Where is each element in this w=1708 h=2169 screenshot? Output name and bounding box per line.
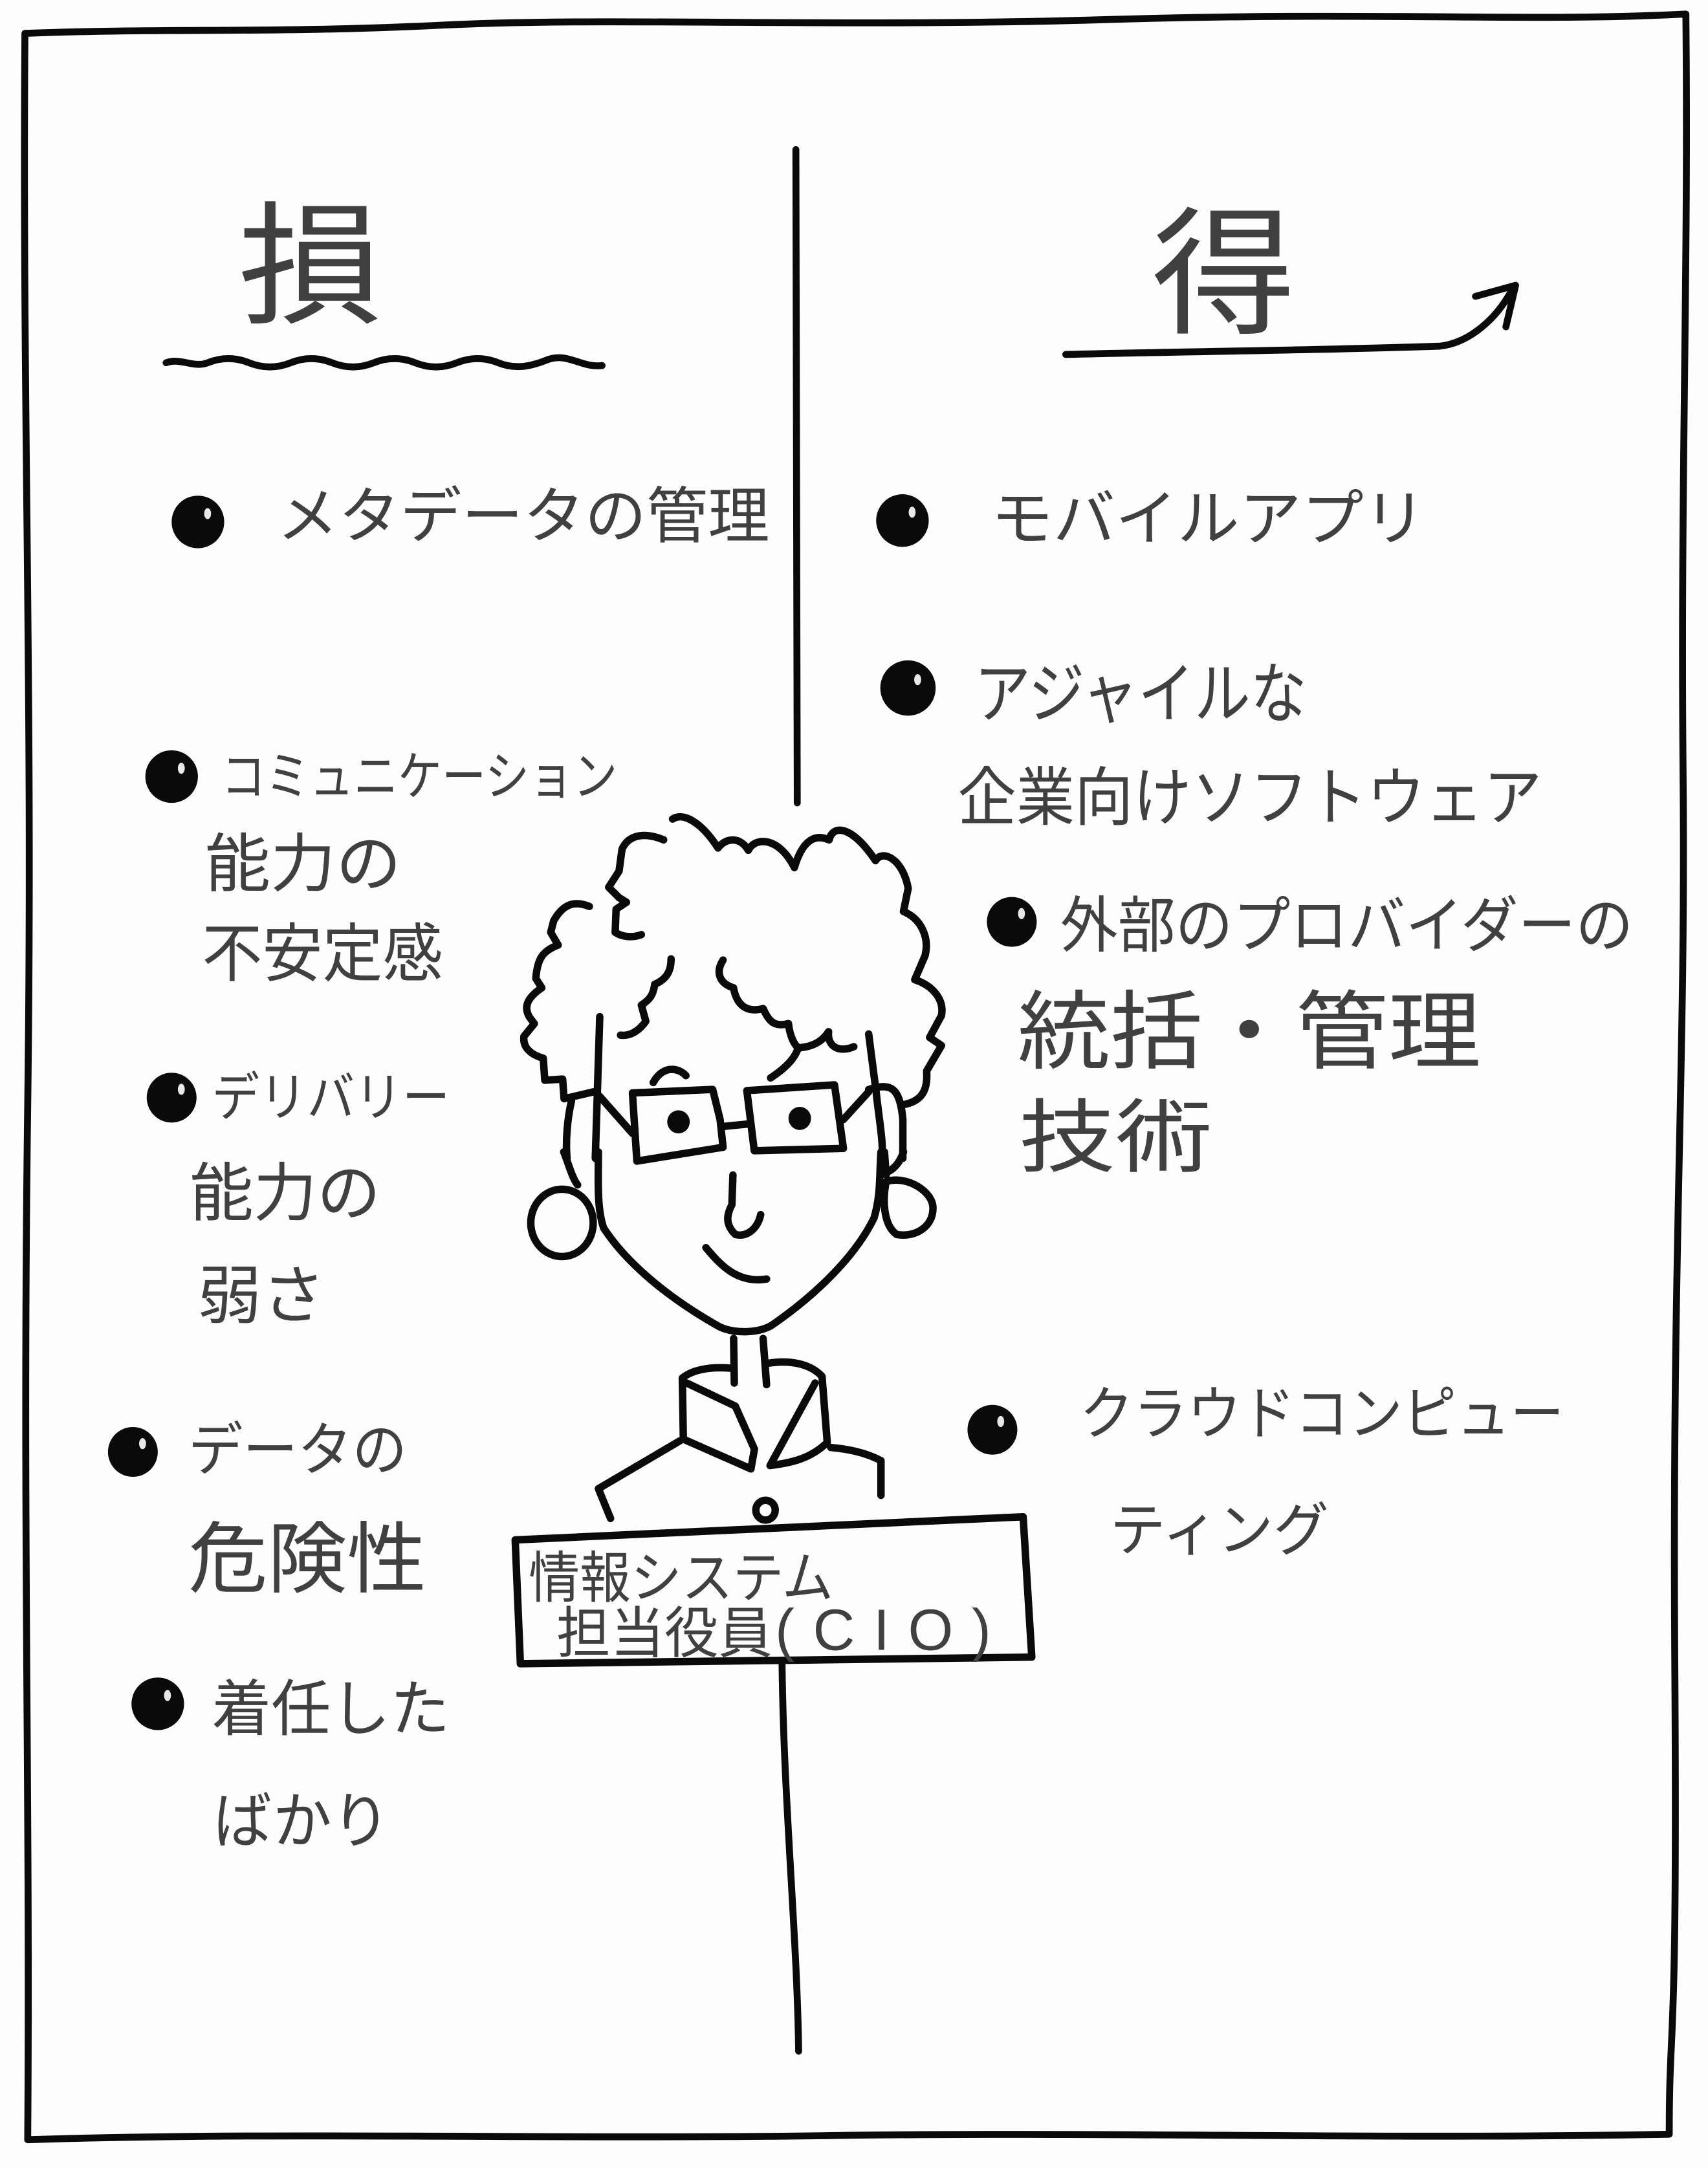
gain item: agile enterprise software: アジャイルな xyxy=(974,657,1307,731)
gain item: external provider management skills: 技術 xyxy=(1019,1094,1212,1183)
loss item: just appointed: ばかり xyxy=(213,1787,390,1855)
loss item: metadata management: メタデータの管理 xyxy=(277,482,769,550)
loss item: just appointed xyxy=(131,1675,450,1855)
gain item: cloud computing: ティング xyxy=(1110,1498,1329,1563)
hair and upper face xyxy=(524,817,942,1161)
character: CIO portrait xyxy=(524,817,942,1520)
loss item: communication skills: 不安定感 xyxy=(202,919,443,990)
heading: loss: 損 xyxy=(238,193,382,342)
name plate: 情報システム xyxy=(529,1548,833,1609)
heading: gain with arrow xyxy=(1066,198,1516,354)
loss item: communication skills: コミュニケーション xyxy=(221,747,617,806)
gain item: cloud computing: クラウドコンピュー xyxy=(1080,1382,1564,1447)
gain item: agile enterprise software xyxy=(881,657,1542,833)
name plate xyxy=(515,1517,1032,1665)
loss item: data risk xyxy=(108,1418,426,1603)
name plate: (CIO) xyxy=(775,1598,991,1662)
gain item: external provider management skills xyxy=(987,892,1633,1183)
gain item: agile enterprise software: 企業向けソフトウェア xyxy=(958,762,1542,833)
lower face, earrings, collar and shoulders xyxy=(531,1152,933,1520)
gain item: external provider management skills: 統括・管理 xyxy=(1017,985,1481,1080)
central vertical divider xyxy=(782,149,798,2051)
loss item: data risk: データの xyxy=(188,1418,407,1483)
loss item: delivery capability: 能力の xyxy=(190,1158,380,1229)
loss item: delivery capability: デリバリー xyxy=(212,1069,450,1128)
loss item: data risk: 危険性 xyxy=(188,1517,426,1603)
gain item: mobile apps: モバイルアプリ xyxy=(991,485,1426,553)
loss item: communication skills: 能力の xyxy=(205,828,401,899)
gain item: cloud computing xyxy=(967,1382,1564,1563)
loss item: delivery capability xyxy=(147,1069,450,1331)
name plate: 担当役員 xyxy=(556,1604,772,1665)
loss item: communication skills xyxy=(146,747,617,990)
heading: gain with arrow: 得 xyxy=(1152,198,1295,353)
heading: loss xyxy=(166,193,602,367)
loss item: delivery capability: 弱さ xyxy=(198,1260,325,1331)
loss item: just appointed: 着任した xyxy=(212,1675,450,1743)
gain item: external provider management skills: 外部のプロバイダーの xyxy=(1060,892,1633,960)
